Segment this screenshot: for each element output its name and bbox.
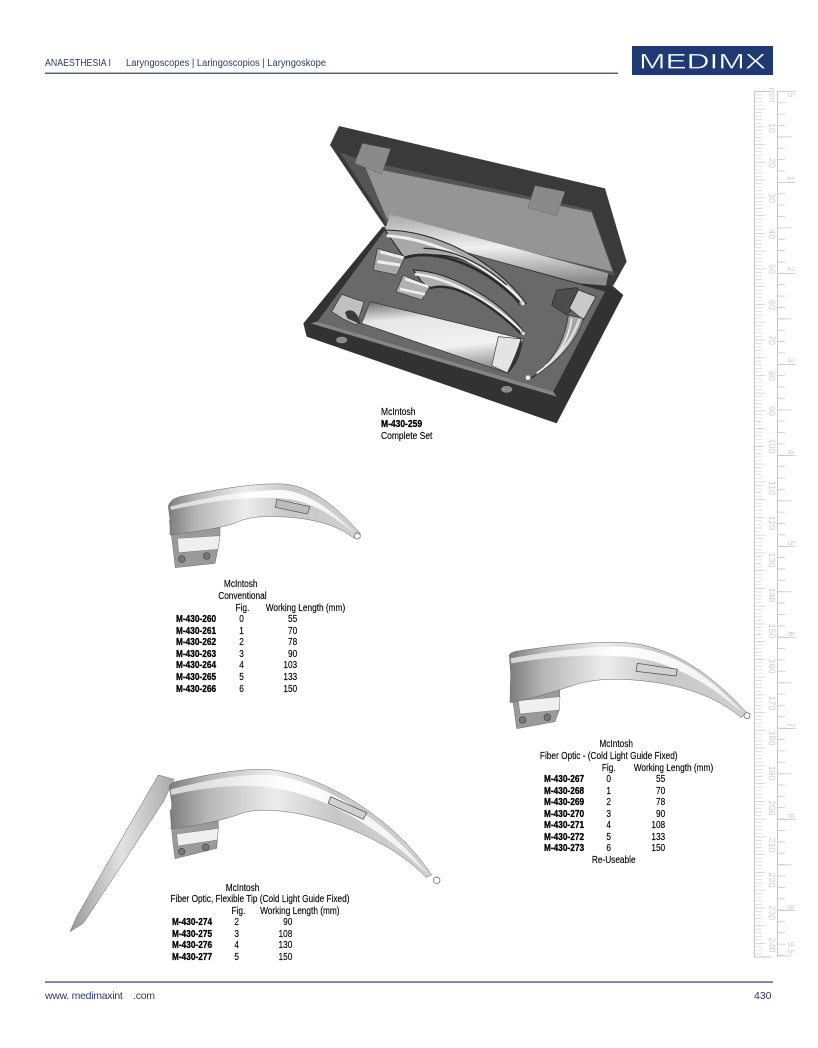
- table: McIntosh conventional: 4: [239, 659, 244, 670]
- table: McIntosh fiber optic: 78: [656, 796, 665, 807]
- upper blades: [373, 230, 526, 306]
- ruler scale: 4: [786, 449, 796, 455]
- table: McIntosh conventional: Conventional: [218, 590, 267, 601]
- ruler scale: 100: [767, 438, 777, 454]
- ruler scale: 180: [767, 730, 777, 746]
- table: McIntosh fiber optic: 70: [656, 785, 665, 796]
- table: McIntosh conventional: M-430-264: [176, 659, 217, 670]
- table: McIntosh conventional: 3: [239, 648, 244, 659]
- logo: Medimax: MEDIMX: [639, 50, 766, 74]
- ruler scale: 40: [767, 229, 777, 239]
- ruler scale: 90: [767, 406, 777, 416]
- table: McIntosh conventional: M-430-266: [176, 683, 216, 694]
- table: McIntosh conventional: 150: [283, 683, 297, 694]
- table: McIntosh fiber optic: 3: [606, 808, 611, 819]
- caption: complete set: M-430-259: [381, 418, 422, 429]
- table: McIntosh conventional: 1: [239, 625, 244, 636]
- lower blades: [396, 270, 525, 335]
- table: McIntosh fiber optic: [540, 738, 713, 865]
- table: McIntosh flexible tip: M-430-274: [172, 916, 213, 927]
- table: McIntosh conventional: 70: [288, 625, 297, 636]
- ruler scale: 200: [767, 800, 777, 816]
- table: McIntosh fiber optic: 6: [606, 842, 611, 853]
- ruler scale: 80: [767, 371, 777, 381]
- table: McIntosh conventional: McIntosh: [224, 578, 258, 589]
- ruler scale: 170: [767, 695, 777, 711]
- ruler scale: 150: [767, 623, 777, 639]
- ruler scale: 110: [767, 481, 777, 495]
- ruler scale: 20: [767, 158, 777, 168]
- table: McIntosh conventional: 133: [283, 671, 297, 682]
- ruler scale: 130: [767, 552, 777, 568]
- table: McIntosh conventional: 6: [239, 683, 244, 694]
- battery handle: [332, 294, 523, 373]
- table: McIntosh conventional: 90: [288, 648, 297, 659]
- table: McIntosh flexible tip: 5: [234, 951, 239, 962]
- table: McIntosh fiber optic: 2: [606, 796, 611, 807]
- table: McIntosh flexible tip: 3: [234, 928, 239, 939]
- logo: Medimax: [632, 46, 773, 75]
- table: McIntosh conventional: M-430-261: [176, 625, 216, 636]
- illustration: conventional blade: [168, 484, 361, 568]
- table: McIntosh conventional: Fig.: [235, 602, 249, 613]
- table: McIntosh fiber optic: 1: [606, 785, 611, 796]
- footer page number: 430: [754, 990, 772, 1002]
- ruler scale: 6: [786, 631, 796, 637]
- table: McIntosh conventional: [176, 578, 345, 694]
- table: McIntosh flexible tip: McIntosh: [226, 882, 259, 893]
- table: McIntosh fiber optic: Working Length (mm): [634, 762, 713, 773]
- ruler scale: 2: [786, 266, 796, 272]
- footer website: www. medimaxint .com: [44, 990, 155, 1002]
- ruler scale: 230: [767, 905, 777, 921]
- ruler scale: 7: [786, 722, 796, 728]
- table: McIntosh conventional: M-430-265: [176, 671, 216, 682]
- ruler scale: 70: [767, 335, 777, 345]
- ruler scale: 10: [767, 123, 777, 133]
- table: McIntosh conventional: 0: [239, 613, 244, 624]
- ruler scale: 210: [767, 837, 777, 853]
- ruler scale: 220: [767, 872, 777, 888]
- ruler scale: 5: [786, 540, 796, 546]
- ruler scale: 140: [767, 587, 777, 603]
- caption: complete set: Complete Set: [381, 430, 433, 441]
- illustration: flexible tip blade with lever: [70, 769, 440, 932]
- table: McIntosh conventional: 55: [288, 613, 297, 624]
- table: McIntosh flexible tip: 4: [234, 939, 239, 950]
- ruler scale: 8: [786, 813, 796, 819]
- table: McIntosh flexible tip: Fig.: [231, 905, 245, 916]
- ruler scale: 1: [786, 175, 796, 181]
- table: McIntosh fiber optic: M-430-273: [544, 842, 584, 853]
- illustration: fiber optic blade: [509, 642, 750, 729]
- header section title: [45, 57, 326, 69]
- caption: complete set: [381, 406, 433, 441]
- ruler scale: 120: [767, 515, 777, 531]
- header section title: ANAESTHESIA I: [45, 57, 111, 69]
- table: McIntosh fiber optic: M-430-268: [544, 785, 584, 796]
- table: McIntosh flexible tip: M-430-277: [172, 951, 212, 962]
- table: McIntosh flexible tip: 90: [283, 916, 292, 927]
- illustration: complete laryngoscope set in case: [303, 126, 627, 423]
- table: McIntosh conventional: 5: [239, 671, 244, 682]
- ruler scale: [754, 88, 796, 957]
- table: McIntosh fiber optic: 90: [656, 808, 665, 819]
- ruler scale: mm: [767, 88, 777, 102]
- table: McIntosh fiber optic: Fiber Optic - (Cold Light Guide Fixed): [540, 750, 678, 761]
- table: McIntosh fiber optic: 4: [606, 819, 611, 830]
- table: McIntosh fiber optic: 133: [651, 831, 665, 842]
- header section title: Laryngoscopes | Laringoscopios | Laryngoskope: [126, 57, 326, 69]
- table: McIntosh flexible tip: [170, 882, 350, 962]
- caption: complete set: McIntosh: [381, 406, 415, 417]
- table: McIntosh conventional: 78: [288, 636, 297, 647]
- table: McIntosh conventional: M-430-262: [176, 636, 216, 647]
- table: McIntosh conventional: M-430-263: [176, 648, 216, 659]
- table: McIntosh fiber optic: M-430-267: [544, 773, 584, 784]
- table: McIntosh flexible tip: Working Length (mm): [260, 905, 340, 916]
- table: McIntosh fiber optic: 150: [651, 842, 665, 853]
- table: McIntosh fiber optic: Fig.: [602, 762, 616, 773]
- table: McIntosh fiber optic: 5: [606, 831, 611, 842]
- ruler scale: 190: [767, 765, 777, 781]
- table: McIntosh flexible tip: 130: [279, 939, 292, 950]
- ruler scale: 50: [767, 264, 777, 274]
- table: McIntosh flexible tip: 150: [279, 951, 292, 962]
- table: McIntosh fiber optic: M-430-270: [544, 808, 584, 819]
- ruler scale: 3: [786, 357, 796, 363]
- table: McIntosh flexible tip: M-430-276: [172, 939, 212, 950]
- table: McIntosh fiber optic: 108: [651, 819, 665, 830]
- table: McIntosh fiber optic: M-430-272: [544, 831, 584, 842]
- ruler scale: 60: [767, 300, 777, 310]
- table: McIntosh flexible tip: 108: [279, 928, 292, 939]
- table: McIntosh fiber optic: Re-Useable: [592, 854, 636, 865]
- table: McIntosh conventional: 103: [283, 659, 297, 670]
- ruler scale: 5: [786, 92, 796, 98]
- ruler scale: 30: [767, 193, 777, 203]
- table: McIntosh conventional: 2: [239, 636, 244, 647]
- table: McIntosh fiber optic: M-430-271: [544, 819, 584, 830]
- ruler scale: 160: [767, 658, 777, 674]
- table: McIntosh conventional: M-430-260: [176, 613, 216, 624]
- table: McIntosh conventional: Working Length (mm): [266, 602, 345, 613]
- ruler scale: 9.5: [786, 942, 796, 954]
- folded small blade: [525, 288, 596, 380]
- table: McIntosh fiber optic: M-430-269: [544, 796, 584, 807]
- table: McIntosh fiber optic: McIntosh: [599, 738, 633, 749]
- table: McIntosh fiber optic: 55: [656, 773, 665, 784]
- table: McIntosh flexible tip: Fiber Optic, Flexible Tip (Cold Light Guide Fixed): [170, 893, 350, 904]
- ruler scale: 240: [767, 937, 777, 953]
- table: McIntosh flexible tip: 2: [234, 916, 239, 927]
- ruler scale: 9: [786, 904, 796, 910]
- table: McIntosh flexible tip: M-430-275: [172, 928, 212, 939]
- table: McIntosh fiber optic: 0: [606, 773, 611, 784]
